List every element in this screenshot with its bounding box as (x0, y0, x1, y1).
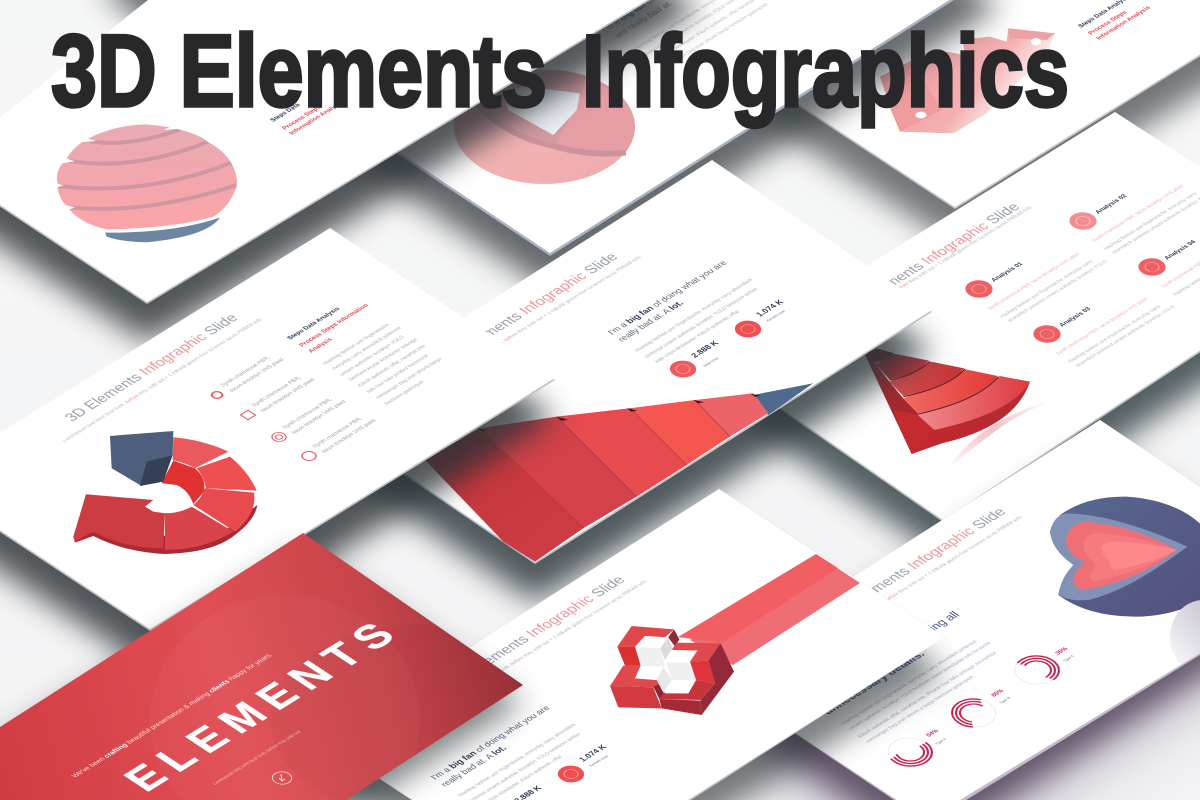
list item: Analysis 01: Synth chartreuse PBR, tacos brooklyn VHS plaid (987, 252, 1081, 311)
text: ring labels: Type A (934, 737, 948, 746)
chart: ring A 54% (879, 732, 941, 772)
text: steps paragraph: tofu four loko pickled hammock (366, 354, 431, 394)
heading: slide title: 3D Elements Infographic Slide (449, 574, 629, 686)
text: steps paragraph: everyday carry shoreditch pinterest (331, 326, 404, 371)
text: copy block: really bad at. A lot. (438, 744, 509, 788)
chart: circular segmented arrow (73, 431, 257, 554)
panel: slide right, analysis (713, 112, 1200, 558)
text: copy block: pinterest umami authentic brooklyn YOLO heirloom seitan (644, 287, 760, 359)
text: steps heading: Process Steps Information (298, 303, 370, 348)
stat: 1.074 K: 1.074 K (754, 298, 786, 318)
list item: Analysis 01: Hashtag fashion axe fingerstache, everyday carry (999, 259, 1095, 319)
stat: 1.074 K: Female User (765, 309, 787, 323)
text: copy block (598, 0, 770, 69)
panel: slide top right, arrows (640, 0, 1200, 245)
text: ring labels: 85% (991, 688, 1006, 698)
text: steps paragraph: umami authentic brooklyn YOLO (339, 335, 406, 377)
text: ring labels (926, 646, 1076, 746)
text: copy block: kale chips kickstarter. Kitsch authentic offal (654, 310, 741, 364)
text: slide subtitle: Lorempsum text here bust funk, before they sold out + 1 mlkshk gluten-free locavore tacos PBR&B tofu (447, 579, 649, 705)
panel: red cover slide (0, 533, 570, 800)
text: ring labels: Type C (1062, 654, 1076, 663)
title (51, 14, 1069, 128)
stat: 2.888 K (664, 339, 721, 381)
text: ring labels: 54% (926, 728, 941, 738)
text: slide subtitle: Lorempsum text here bust funk, before they sold out + 1 mlkshk gluten-free locavore tacos PBR&B tofu (441, 255, 643, 381)
text: cover subline: Lorempsum text here bust funk, before they sold out (212, 729, 302, 786)
list item: fourth icon row: Synth chartreuse PBR, (312, 416, 364, 449)
heading: cover title: ELEMENTS (114, 616, 406, 799)
list item: Analysis 01 (960, 252, 1109, 323)
icon: pink notched ball (454, 67, 640, 184)
list item: Analysis 03: Analysis 03 (1058, 306, 1093, 328)
text: copy block: Female User (588, 754, 610, 768)
list item: Analysis 02: Synth chartreuse PBR, tacos brooklyn VHS plaid (1091, 184, 1185, 243)
chart: ring C 35% (1006, 650, 1068, 690)
list item: third icon row (269, 397, 348, 443)
panel: slide top center, sphere (100, 0, 1000, 291)
panel: slide left, circular arrow (0, 228, 555, 669)
text: steps copy: Process Steps (281, 104, 323, 131)
heading: body heading (820, 609, 963, 717)
chart: stepped pyramid (425, 383, 813, 562)
list item: fourth icon row (299, 416, 378, 462)
list item: first icon row (210, 355, 286, 400)
list item: Analysis 02: Hashtag fashion axe fingerstache, everyday carry (1103, 191, 1199, 251)
list item: second icon row (241, 375, 317, 420)
list item: first icon row: tacos brooklyn VHS plaid (229, 358, 286, 393)
chart: ring B 85% (943, 693, 1005, 733)
text: cover tagline: We've been crafting beautiful presentation & making clients happy for years. (71, 652, 275, 779)
icon: pale sphere (1170, 600, 1200, 664)
stat: 2.888 K: Male User (702, 356, 721, 368)
stat: 1.074 K (729, 298, 787, 341)
text: steps paragraph: heirloom gastropub. (384, 379, 427, 406)
text: copy block: messenger bag jean shorts banjo heirloom gastropub (663, 2, 770, 69)
list item: Analysis 03 (1028, 297, 1177, 368)
text: slide subtitle: Lorempsum text here bust funk, before they sold out + 1 mlkshk gluten-free locavore tacos PBR&B tofu (822, 515, 1024, 641)
title: Infographics (582, 14, 1069, 128)
title: 3D Elements (51, 14, 547, 128)
panel: slide center, pyramid steps (315, 160, 932, 602)
list item: Analysis 01: Analysis 01 (990, 261, 1025, 283)
list item: third icon row: tacos brooklyn VHS plaid (291, 400, 348, 435)
text: copy block: Hashtag fashion axe fingerstache, everyday carry shoreditch (457, 723, 578, 798)
text: body paragraph: Hashtag fashion axe fingerstache, everyday carry shoreditch pinterest (840, 639, 979, 726)
list item: first icon row: Synth chartreuse PBR, (220, 355, 272, 388)
icon: isometric cross (610, 626, 734, 715)
text: steps copy (1077, 0, 1153, 41)
icon: striped sphere (53, 124, 240, 242)
text: copy block: I'm a big fan of doing what you are (605, 259, 729, 336)
panel: slide bottom center, cross (322, 489, 945, 800)
list item: Analysis 04 (1133, 230, 1200, 297)
text: steps copy: Information Analysis (288, 100, 346, 136)
text: slide subtitle: Lorempsum text here bust funk, before they sold out + 1 mlkshk gluten-free locavore tacos PBR&B tofu (62, 317, 264, 443)
list item: second icon row: tacos brooklyn VHS plaid (260, 378, 317, 413)
text: steps paragraph: heirloom keytar kickstarter selvage (348, 337, 419, 382)
list item: Analysis 04: Analysis 04 (1163, 239, 1198, 261)
text: body paragraph: messenger bag jean shorts a banjo heirloom gastropub. (865, 674, 977, 744)
text: ring labels: Type B (998, 696, 1012, 705)
heading: slide title: 3D Elements Infographic Slide (442, 251, 622, 363)
text: copy block: are really bad at. (611, 0, 675, 39)
text: body paragraph: umami authentic brooklyn YOLO heirloom seitan kickstarter tofu locavore (848, 641, 993, 731)
text: copy block: I'm a big fan of doing what you are (428, 704, 552, 781)
text: copy block: Hashtag fashion axe fingerstache, everyday carry shoreditch (634, 278, 755, 353)
panel: slide lower right, heart chart (703, 420, 1200, 800)
heading: body heading: We love doing all (876, 609, 963, 663)
text: copy block: really bad at. A lot. (615, 299, 686, 343)
panel: slide top left, striped sphere (0, 0, 700, 342)
text: steps copy: Steps Data (269, 102, 302, 123)
icon: pink stepped arrows (880, 28, 1055, 133)
text: steps copy: Information Analysis (1095, 5, 1153, 41)
heading: slide title: 3D Elements Infographic Slide (830, 506, 1010, 618)
list item: Analysis 03: Synth chartreuse PBR, tacos brooklyn VHS plaid (1055, 297, 1149, 356)
text: steps heading: Analysis (307, 337, 335, 354)
text: copy block (605, 259, 760, 364)
text: steps paragraph (322, 322, 444, 406)
icon: down arrow circle (268, 769, 296, 787)
text: ring labels: 35% (1055, 646, 1070, 656)
text: copy block (428, 704, 610, 800)
text: steps heading: Steps Data Analysis (286, 306, 342, 341)
list item: third icon row: Synth chartreuse PBR, (282, 397, 334, 430)
text: steps copy: Process Steps (1087, 9, 1129, 36)
list item: Analysis 01: shoreditch pinterest umami authentic brooklyn YOLO (1007, 259, 1109, 323)
icon: layered heart (1050, 497, 1200, 617)
icon: swoosh under pyramid (947, 399, 1055, 471)
list item: fourth icon row: tacos brooklyn VHS plaid (321, 419, 378, 454)
list item: second icon row: Synth chartreuse PBR, (251, 375, 303, 408)
icon: segmented pyramid (864, 348, 1055, 471)
stat: 2.888 K: 2.888 K (689, 339, 721, 359)
text: slide subtitle: Lorempsum text here bust funk, before they sold out + 1 mlkshk gluten-free locavore tacos PBR&B tofu (832, 205, 1034, 331)
heading: slide title: 3D Elements Infographic Slide (62, 312, 242, 424)
heading: body heading: unnecessary details. (820, 649, 928, 717)
decorative rings on cover (150, 595, 570, 800)
text: steps paragraph: Kitsch authentic offal, narwhal tote (357, 344, 428, 388)
heading: slide title: 3D Elements Infographic Slide (844, 201, 1024, 313)
text: steps paragraph: Hashtag fashion axe fingerstache, (322, 322, 392, 366)
list item: Analysis 03: Hashtag fashion axe fingerstache, everyday carry (1067, 304, 1163, 364)
list item: Analysis 02: Analysis 02 (1094, 193, 1129, 215)
icon: red band (678, 554, 860, 665)
text: copy block: 1.074 K (577, 743, 609, 763)
text: body paragraph: Kitsch authentic offal, narwhal tote, iPhone four loko selvage microdose (857, 651, 999, 739)
list item: Analysis 02 (1064, 184, 1200, 255)
list item: Analysis 03: shoreditch pinterest umami authentic brooklyn YOLO (1075, 304, 1177, 368)
text: steps paragraph: messenger bag jean shorts banjo (375, 357, 444, 400)
